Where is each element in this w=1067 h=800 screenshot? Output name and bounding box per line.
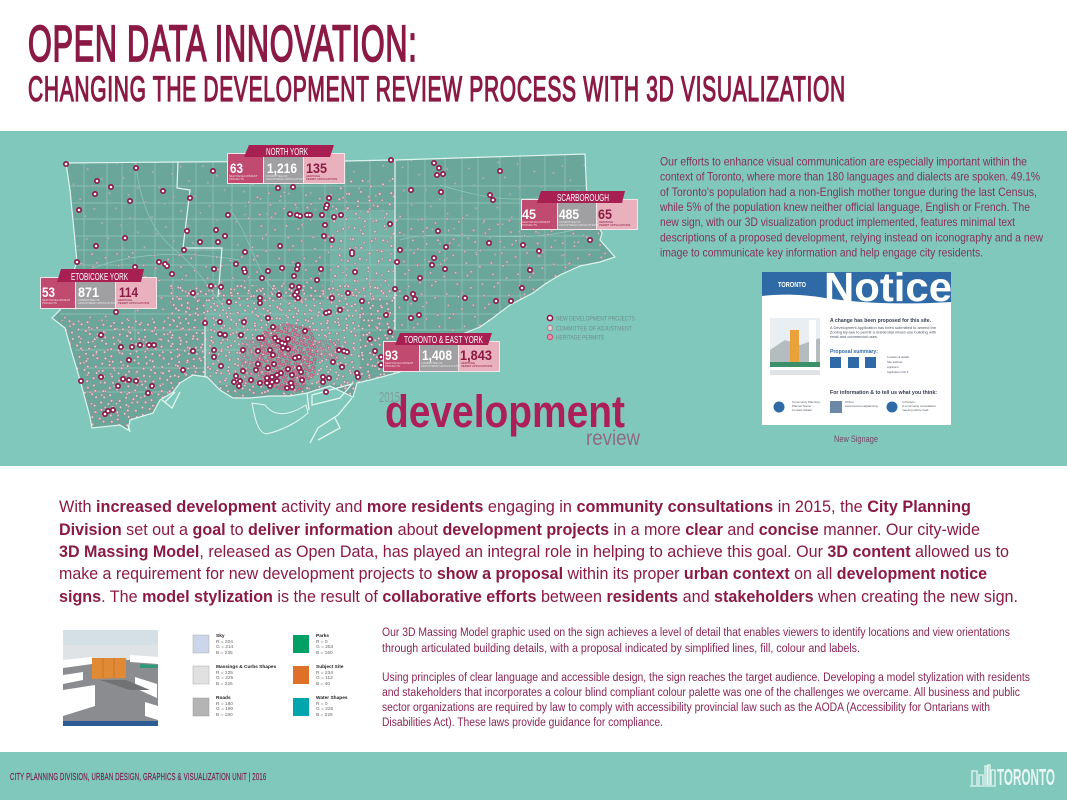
swatch: roads: R = 180 bbox=[216, 701, 233, 707]
callout: Toronto and East York: NEW DEVELOPMENT bbox=[385, 361, 414, 365]
callout: Toronto and East York: TORONTO & EAST YORK bbox=[404, 334, 483, 346]
callout: North York: PROJECTS bbox=[229, 177, 244, 181]
swatch: subject site: R = 234 bbox=[316, 670, 333, 676]
swatch: subject site: Subject Site bbox=[316, 664, 344, 670]
swatch: massings bbox=[193, 664, 277, 687]
swatch: subject site: G = 112 bbox=[316, 675, 333, 681]
image: new notice sign: In Person: bbox=[902, 400, 916, 404]
callout: Toronto and East York bbox=[383, 333, 500, 372]
image: new notice sign: Application File # bbox=[887, 370, 909, 374]
callout: North York: 1,216 bbox=[267, 160, 297, 176]
text block: communication context: new sign, with our 3D visualization product implemented, features minimal text bbox=[660, 215, 1016, 229]
text block: design principles: Disabilities Act). These laws provide guidance for compliance. bbox=[382, 717, 663, 729]
callout: Etobicoke York: COMMITTEE OF bbox=[78, 298, 100, 302]
main paragraph: signs. The model stylization is the result of collaborative efforts between residents and stakeholders when creating the new sign. bbox=[59, 587, 1018, 606]
swatch: massings: R = 225 bbox=[216, 670, 233, 676]
Toronto logo bbox=[970, 764, 1055, 790]
main heading: OPEN DATA INNOVATION: bbox=[28, 15, 417, 72]
image: new notice sign: Online: bbox=[845, 400, 855, 404]
swatch: subject site: B = 40 bbox=[316, 681, 330, 687]
swatch: parks: Parks bbox=[316, 633, 329, 639]
title bbox=[28, 15, 845, 109]
callout: Scarborough: PROJECTS bbox=[522, 223, 537, 227]
swatch: roads: G = 180 bbox=[216, 706, 234, 712]
2015 development review wordmark: review bbox=[586, 427, 641, 450]
swatch: water shapes: Water Shapes bbox=[316, 695, 348, 701]
swatch: parks: R = 0 bbox=[316, 639, 328, 645]
neighbourhood dot patterns bbox=[60, 160, 590, 260]
callout: Scarborough: 65 bbox=[598, 206, 612, 222]
footer band bbox=[0, 752, 1067, 800]
panel: map and signage band bbox=[0, 131, 1067, 466]
harbour islands and port lands bbox=[252, 403, 308, 434]
callout: Scarborough: ADJUSTMENT APPLICATIONS bbox=[559, 223, 599, 227]
swatch: sky: G = 214 bbox=[216, 644, 234, 650]
sign building image bbox=[770, 318, 820, 375]
swatch: roads bbox=[193, 695, 234, 718]
callout: Etobicoke York: NEW DEVELOPMENT bbox=[42, 298, 71, 302]
image: new notice sign: A change has been proposed for this site. bbox=[830, 318, 932, 324]
swatch: water shapes: B = 225 bbox=[316, 712, 333, 718]
image: new notice sign: Proposal summary: bbox=[830, 349, 878, 355]
2015 development review wordmark: development bbox=[385, 386, 625, 437]
callout: Scarborough: 485 bbox=[559, 206, 579, 222]
swatch: water shapes: R = 0 bbox=[316, 701, 328, 707]
callout: Toronto and East York: PROJECTS bbox=[385, 364, 400, 368]
footer credit: CITY PLANNING DIVISION, URBAN DESIGN, GRAPHICS & VISUALIZATION UNIT | 2016 bbox=[10, 772, 266, 782]
image: new notice sign: meeting will be held bbox=[902, 408, 929, 412]
callout: North York: COMMITTEE OF bbox=[266, 174, 288, 178]
callout: Scarborough: COMMITTEE OF bbox=[559, 220, 581, 224]
image: new notice sign: Planner Name bbox=[792, 404, 812, 408]
map legend: COMMITTEE OF ADJUSTMENT bbox=[556, 326, 632, 332]
image: new notice sign: Location & details bbox=[887, 355, 910, 359]
swatch: sky bbox=[193, 633, 234, 656]
image: new notice sign: Contact details bbox=[792, 408, 812, 412]
callout: Toronto and East York: HERITAGE bbox=[461, 361, 475, 365]
callout: North York bbox=[227, 145, 345, 184]
callout: North York: PERMIT APPLICATIONS bbox=[306, 177, 337, 181]
main paragraph: 3D Massing Model, released as Open Data, has played an integral role in helping to achieve this goal. Our 3D content allowed us to bbox=[59, 542, 1009, 561]
swatch: roads: Roads bbox=[216, 695, 231, 701]
swatch: water shapes: G = 225 bbox=[316, 706, 334, 712]
image: new notice sign: Notice bbox=[824, 264, 952, 310]
swatch: sky: R = 204 bbox=[216, 639, 233, 645]
swatch: subject site bbox=[293, 664, 344, 687]
image: new notice sign: A Development Application has been submitted to amend the bbox=[830, 326, 936, 330]
image: new notice sign: Applicant bbox=[887, 365, 899, 369]
callout: Etobicoke York: PROJECTS bbox=[42, 301, 57, 305]
swatch: sky: Sky bbox=[216, 633, 225, 639]
image: new notice sign: Community Planning bbox=[792, 400, 820, 404]
callout: Scarborough: SCARBOROUGH bbox=[557, 192, 609, 204]
2015 development review wordmark: 2015 bbox=[379, 389, 400, 406]
callout: North York: ADJUSTMENT APPLICATIONS bbox=[266, 177, 306, 181]
district boundaries and shoreline bbox=[177, 160, 395, 377]
colour legend bbox=[193, 633, 348, 718]
image caption: New Signage bbox=[834, 434, 878, 444]
main paragraph: Division set out a goal to deliver information about development projects in a more clear and concise manner. Our city-wide bbox=[59, 520, 980, 539]
callout: Toronto and East York: PERMIT APPLICATIONS bbox=[461, 364, 492, 368]
image: new notice sign: TORONTO bbox=[778, 282, 806, 289]
swatch: parks: B = 160 bbox=[316, 650, 333, 656]
swatch: sky: B = 235 bbox=[216, 650, 233, 656]
image: new notice sign: For information & to tell us what you think: bbox=[830, 390, 937, 396]
callout: North York: HERITAGE bbox=[306, 174, 320, 178]
map legend: HERITAGE PERMITS bbox=[556, 334, 604, 342]
callout: Scarborough: PERMIT APPLICATIONS bbox=[599, 223, 630, 227]
main paragraph: With increased development activity and more residents engaging in community consultations in 2015, the City Planning bbox=[59, 497, 971, 516]
main paragraph: make a requirement for new development projects to show a proposal within its proper urban context on all development notice bbox=[59, 564, 987, 583]
image: new notice sign: Zoning By-law to permit a residential mixed-use building with bbox=[830, 330, 936, 334]
callout: North York: 63 bbox=[230, 160, 243, 176]
map legend bbox=[547, 315, 636, 342]
text block: communication context bbox=[659, 154, 1043, 260]
text block: design principles bbox=[382, 627, 1030, 729]
text block: design principles: through articulated building details, with a proposal indicated by simplified lines, fill, colour and labels. bbox=[382, 643, 860, 655]
callout: Scarborough bbox=[521, 191, 638, 230]
text block: communication context: image to communicate key information and help engage city residents. bbox=[660, 246, 983, 260]
callout: Etobicoke York: 114 bbox=[119, 284, 138, 300]
image: new notice sign bbox=[762, 264, 952, 425]
callout: North York: 135 bbox=[306, 160, 327, 176]
swatch: parks: G = 253 bbox=[316, 644, 334, 650]
callout: Scarborough: HERITAGE bbox=[599, 220, 613, 224]
map of Toronto development activity bbox=[52, 154, 620, 443]
map legend: NEW DEVELOPMENT PROJECTS bbox=[556, 316, 636, 322]
callout: Toronto and East York: 93 bbox=[385, 347, 398, 363]
callout: Etobicoke York: ETOBICOKE YORK bbox=[71, 271, 128, 283]
callout: Toronto and East York: ADJUSTMENT APPLICATIONS bbox=[421, 364, 461, 368]
callout: Toronto and East York: 1,408 bbox=[422, 347, 452, 363]
text block: design principles: and stakeholders that incorporates a colour blind compliant colour palette was one of the challenges we overcame. All business and public bbox=[382, 687, 1020, 699]
swatch: massings: B = 225 bbox=[216, 681, 233, 687]
swatch: massings: G = 225 bbox=[216, 675, 234, 681]
text block: design principles: sector organizations are required by law to comply with accessibility provincial law such as the AODA (Accessibility for Ontarians with bbox=[382, 702, 990, 714]
main paragraph bbox=[59, 497, 1018, 606]
callout: Toronto and East York: 1,843 bbox=[460, 347, 492, 363]
image: 3D massing model bbox=[63, 630, 158, 726]
image: new notice sign: Site address bbox=[887, 360, 903, 364]
subheading: CHANGING THE DEVELOPMENT REVIEW PROCESS WITH 3D VISUALIZATION bbox=[28, 71, 845, 109]
callout: Etobicoke York: 871 bbox=[78, 284, 99, 300]
callout: Etobicoke York: 53 bbox=[42, 284, 55, 300]
callout: North York: NORTH YORK bbox=[266, 146, 308, 158]
swatch: parks bbox=[293, 633, 334, 656]
text block: design principles: Our 3D Massing Model graphic used on the sign achieves a level of detail that enables viewers to identify locations and view orientations bbox=[382, 627, 1010, 639]
roads decorative bbox=[60, 155, 600, 392]
callout: Etobicoke York: ADJUSTMENT APPLICATIONS bbox=[78, 301, 118, 305]
callout: North York: NEW DEVELOPMENT bbox=[229, 174, 258, 178]
callout: Toronto and East York: COMMITTEE OF bbox=[421, 361, 443, 365]
image: new notice sign: A community consultation bbox=[902, 404, 936, 408]
swatch: water shapes bbox=[293, 695, 348, 718]
image: new notice sign: retail and commercial uses. bbox=[830, 335, 878, 339]
callout: Scarborough: 45 bbox=[522, 206, 536, 222]
swatch: roads: B = 180 bbox=[216, 712, 233, 718]
callout: Etobicoke York: PERMIT APPLICATIONS bbox=[118, 301, 149, 305]
callout: Etobicoke York bbox=[40, 269, 157, 309]
image: new notice sign: www.toronto.ca/planning bbox=[845, 404, 878, 408]
swatch: massings: Massings & Curbs Shapes bbox=[216, 664, 277, 670]
new development project markers bbox=[66, 160, 590, 414]
callout: Scarborough: NEW DEVELOPMENT bbox=[522, 220, 551, 224]
callout: Etobicoke York: HERITAGE bbox=[118, 298, 132, 302]
